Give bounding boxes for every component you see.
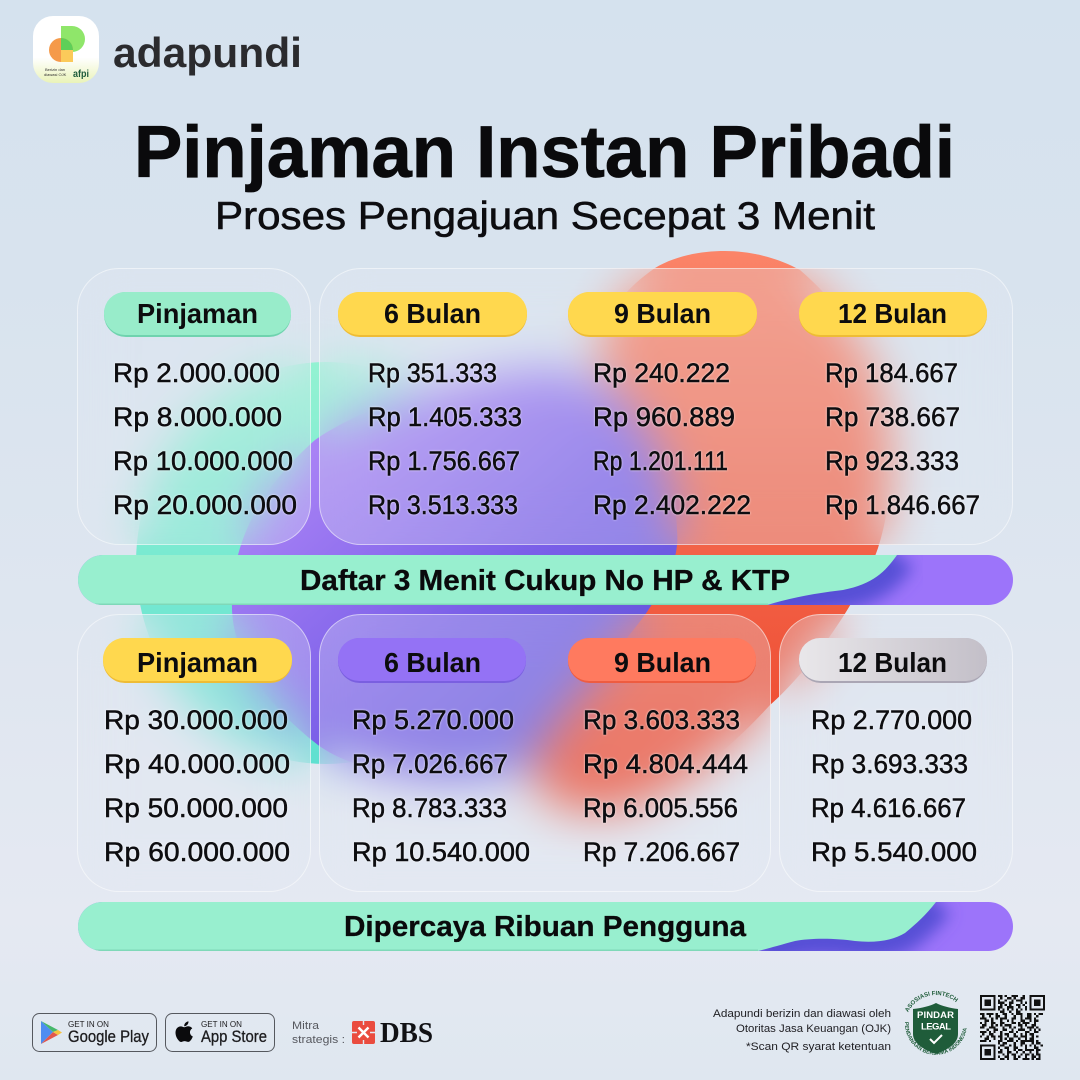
amounts: Rp 2.000.000 — [112, 358, 280, 388]
logo: app icon: afpi — [73, 69, 89, 80]
badge: App Store: App Store — [201, 1027, 267, 1046]
values: 9 months — [592, 358, 750, 520]
partner label: Mitra strategis: Mitra — [292, 1020, 320, 1032]
mint blob — [136, 362, 516, 764]
partner label: Mitra strategis — [292, 1020, 345, 1046]
values: 12 months: Rp 5.540.000 — [810, 836, 976, 866]
pill: 12 Bulan — [798, 292, 986, 336]
values: 12 months: Rp 3.693.333 — [810, 748, 968, 778]
values: 6 months: Rp 1.756.667 — [368, 446, 520, 476]
values: 9 months: Rp 2.402.222 — [592, 490, 750, 520]
pill: 12 Bulan: 12 Bulan — [838, 646, 946, 678]
badge: Google Play — [32, 1013, 157, 1052]
panel: installments 12 months lower — [779, 614, 1013, 892]
badge: Pindar Legal: PENDANAAN BERSAMA INDONESIA — [905, 1022, 967, 1055]
badge: Google Play: GET IN ON — [68, 1020, 109, 1029]
legal text — [713, 1008, 891, 1053]
legal text: *Scan QR syarat ketentuan — [746, 1041, 891, 1053]
pill: Pinjaman: Pinjaman — [136, 298, 258, 328]
pill: Pinjaman: Pinjaman — [136, 646, 258, 678]
amounts: Rp 60.000.000 — [104, 836, 290, 866]
values: 9 months: Rp 6.005.556 — [582, 792, 738, 822]
values: 6 months: Rp 10.540.000 — [352, 836, 530, 866]
values: 9 months: Rp 960.889 — [592, 402, 734, 432]
values: 9 months: Rp 7.206.667 — [582, 836, 740, 866]
values: 9 months: Rp 3.603.333 — [582, 704, 740, 734]
amounts: Rp 40.000.000 — [104, 748, 290, 778]
purple blob — [232, 368, 695, 780]
amounts: Rp 20.000.000 — [112, 490, 296, 520]
badge: Pindar Legal: ASOSIASI FINTECH — [905, 990, 958, 1012]
subtitle: Proses Pengajuan Secepat 3 Menit — [215, 195, 875, 238]
pill: Pinjaman — [102, 638, 292, 682]
banner: Daftar 3 Menit — [78, 555, 1013, 605]
legal text: Adapundi berizin dan diawasi oleh — [713, 1008, 891, 1020]
amounts: Rp 10.000.000 — [112, 446, 292, 476]
values: 9 months — [582, 704, 748, 866]
badge: Pindar Legal — [905, 990, 967, 1055]
values: 12 months — [810, 704, 976, 866]
values: 12 months — [824, 358, 980, 520]
pill: 6 Bulan: 6 Bulan — [384, 646, 480, 678]
pill: 12 Bulan — [798, 638, 986, 682]
pill: 6 Bulan — [338, 292, 526, 336]
amounts — [112, 358, 296, 520]
logo: wordmark: adapundi — [113, 29, 302, 76]
values: 12 months: Rp 4.616.667 — [810, 792, 966, 822]
partner label: Mitra strategis: strategis : — [292, 1034, 345, 1046]
pill: 6 Bulan: 6 Bulan — [384, 298, 480, 328]
values: 12 months: Rp 923.333 — [824, 446, 958, 476]
values: 12 months: Rp 184.667 — [824, 358, 958, 388]
banner: Dipercaya Ribuan Pengguna — [78, 902, 1013, 951]
badge: Google Play: Google Play — [68, 1027, 149, 1046]
red blob — [533, 251, 891, 812]
values: 12 months: Rp 738.667 — [824, 402, 960, 432]
logo: DBS — [352, 1018, 433, 1048]
values: 12 months: Rp 1.846.667 — [824, 490, 980, 520]
pill: 9 Bulan — [568, 638, 756, 682]
QR code — [980, 995, 1045, 1060]
logo: app icon — [33, 16, 99, 83]
pill: 9 Bulan: 9 Bulan — [614, 646, 710, 678]
pill: Pinjaman — [104, 292, 290, 336]
logo: app icon: diawasi OJK — [44, 72, 67, 77]
values: 6 months: Rp 3.513.333 — [368, 490, 518, 520]
banner: Daftar 3 Menit: Daftar 3 Menit Cukup No HP & KTP — [300, 565, 790, 597]
badge: Pindar Legal: LEGAL — [921, 1022, 951, 1032]
amounts — [104, 704, 290, 866]
banner: Dipercaya Ribuan Pengguna: Dipercaya Ribuan Pengguna — [344, 911, 747, 943]
pill: 6 Bulan — [338, 638, 526, 682]
panel: installments 6, 9, 12 months upper — [319, 268, 1013, 545]
badge: App Store — [165, 1013, 275, 1052]
logo: app icon: Berizin dan — [45, 67, 65, 72]
badge: App Store: GET IN ON — [201, 1020, 242, 1029]
legal text: Otoritas Jasa Keuangan (OJK) — [736, 1023, 891, 1035]
pill: 12 Bulan: 12 Bulan — [838, 298, 946, 328]
amounts: Rp 30.000.000 — [104, 704, 288, 734]
pill: 9 Bulan: 9 Bulan — [614, 298, 710, 328]
values: 6 months: Rp 7.026.667 — [352, 748, 508, 778]
values: 6 months: Rp 1.405.333 — [368, 402, 522, 432]
panel: installments 6 and 9 months lower — [319, 614, 771, 892]
values: 6 months — [352, 704, 530, 866]
values: 6 months: Rp 8.783.333 — [352, 792, 506, 822]
badge: Pindar Legal: PINDAR — [917, 1010, 954, 1021]
values: 9 months: Rp 1.201.111 — [592, 446, 728, 476]
values: 6 months: Rp 5.270.000 — [352, 704, 514, 734]
title: Pinjaman Instan Pribadi — [134, 112, 955, 193]
values: 9 months: Rp 4.804.444 — [582, 748, 748, 778]
values: 6 months: Rp 351.333 — [368, 358, 496, 388]
values: 9 months: Rp 240.222 — [592, 358, 730, 388]
values: 6 months — [368, 358, 522, 520]
pill: 9 Bulan — [568, 292, 756, 336]
values: 12 months: Rp 2.770.000 — [810, 704, 972, 734]
panel: amount 2-20 million — [77, 268, 311, 545]
amounts: Rp 8.000.000 — [112, 402, 282, 432]
panel: amount 30-60 million — [77, 614, 311, 892]
amounts: Rp 50.000.000 — [104, 792, 288, 822]
